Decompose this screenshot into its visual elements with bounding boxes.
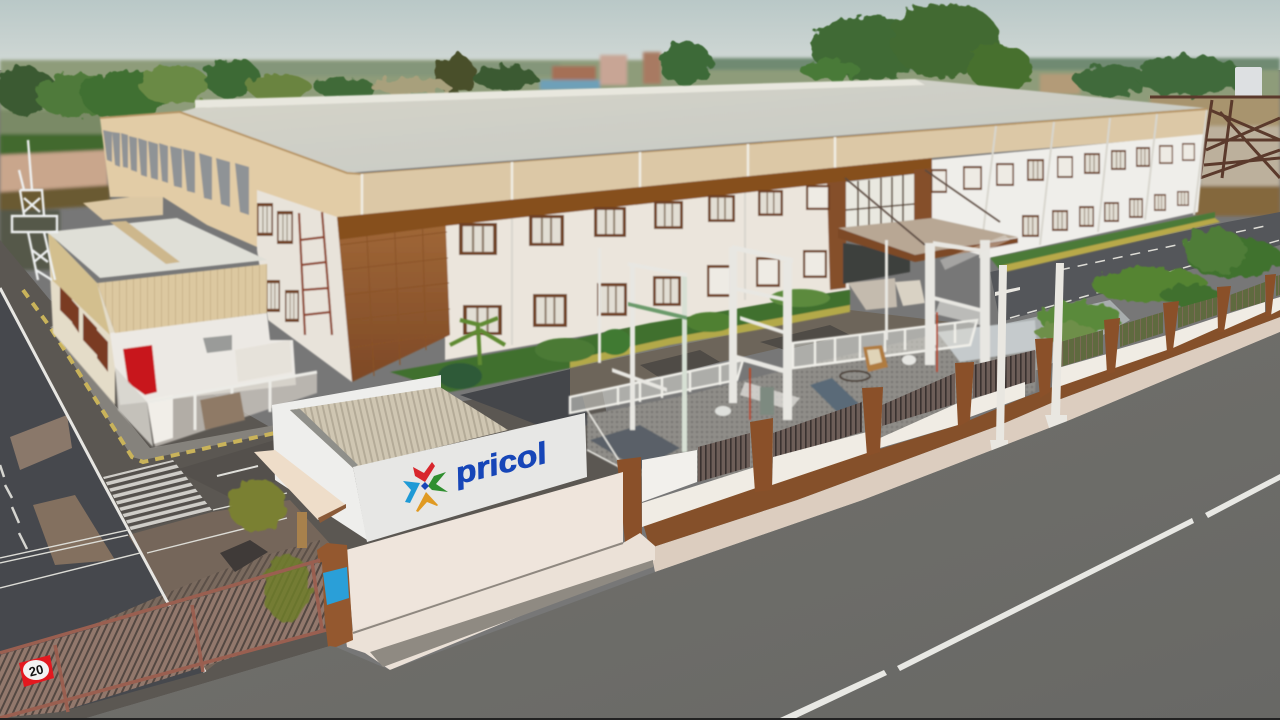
east wing windows lower row <box>1022 191 1189 237</box>
north wing white wall <box>257 190 352 382</box>
painted curb <box>23 290 275 462</box>
white sign panel <box>642 450 697 502</box>
west wing windows lower row <box>463 250 827 335</box>
road centre line <box>780 474 1280 720</box>
guard figure <box>297 512 307 548</box>
annex building <box>47 218 317 447</box>
pricol logo mark <box>403 462 448 512</box>
pale paved area <box>937 320 1037 362</box>
water tank <box>1235 67 1262 98</box>
pricol wordmark: pricol <box>451 437 551 491</box>
brown corner block <box>337 207 450 382</box>
cream curb <box>650 317 1280 572</box>
roof <box>180 79 1205 173</box>
west wing windows upper row <box>459 185 830 255</box>
annex left wall <box>48 232 115 405</box>
fence infill sections <box>698 275 1280 482</box>
dark driveway near asphalt <box>175 440 300 500</box>
poles and gantries <box>598 235 1010 452</box>
gatehouse canopy <box>254 450 346 520</box>
sky <box>0 0 1280 70</box>
service equipment <box>235 340 292 382</box>
side wall windows <box>103 130 249 215</box>
fence pillars <box>617 274 1276 543</box>
right side service road <box>990 212 1280 370</box>
equipment in yard <box>715 312 937 420</box>
gatehouse ribbed roof <box>290 387 508 468</box>
gatehouse <box>254 375 587 548</box>
tan upper cladding <box>362 110 1207 215</box>
white wall <box>346 472 623 633</box>
brown base band <box>642 308 1280 548</box>
white front wall, west wing <box>445 183 850 360</box>
brown fascia band <box>337 158 932 240</box>
landscaping along the building <box>390 212 1220 392</box>
annex fence <box>115 367 317 447</box>
sliding gate <box>0 554 326 718</box>
planter trough <box>370 560 653 667</box>
brown gate pillar <box>317 543 353 647</box>
low canopy at rear <box>83 197 163 220</box>
building left side wall <box>100 112 362 260</box>
white foreground poles <box>990 263 1067 453</box>
shrub near the gatehouse <box>228 479 286 531</box>
speed limit sign: 20 <box>27 661 45 680</box>
blue notice board <box>323 567 349 605</box>
exterior ladder <box>299 212 332 335</box>
main building <box>83 79 1207 382</box>
entrance canopy <box>838 218 1018 255</box>
speed limit sign <box>19 655 54 687</box>
tan shadows on lane <box>10 415 72 470</box>
substation yard <box>570 170 1037 480</box>
background trees <box>0 2 1245 119</box>
gatehouse parapet <box>272 375 441 540</box>
gravel ground <box>587 330 1037 480</box>
annex roof <box>47 218 267 278</box>
zebra crossing <box>103 460 212 532</box>
yard fence <box>570 320 977 478</box>
red door <box>123 345 157 395</box>
overhead conductors <box>845 170 1000 245</box>
right side trees <box>1035 228 1280 342</box>
white wall panels <box>642 297 1280 527</box>
road markings <box>0 493 287 588</box>
shadow on gravel <box>810 378 860 415</box>
atrium glazing <box>843 174 914 284</box>
distant landscape <box>0 52 1280 270</box>
bottom edge <box>0 718 1280 720</box>
left road and forecourt <box>0 240 950 720</box>
gravel strip <box>50 325 275 460</box>
main road <box>80 332 1280 720</box>
annex white wall <box>110 313 296 405</box>
entrance plinths and steps <box>848 278 897 310</box>
front entrance wall <box>317 472 655 670</box>
white road line <box>0 288 205 672</box>
planter ledge <box>345 533 655 670</box>
lattice tower at left <box>12 140 57 280</box>
perimeter fence and wall <box>617 263 1280 572</box>
dark lane <box>0 288 205 718</box>
road in front of planters <box>570 310 950 397</box>
sunlit forecourt <box>128 500 345 672</box>
white front wall, east wing <box>930 134 1205 258</box>
steel structure at right <box>1150 97 1280 178</box>
paver area <box>92 540 322 660</box>
logo sign wall <box>353 413 587 542</box>
annex tan cladding <box>97 264 267 333</box>
east wing windows upper row <box>931 143 1195 193</box>
base asphalt <box>0 240 620 720</box>
shrub seen through the gate <box>263 554 311 622</box>
